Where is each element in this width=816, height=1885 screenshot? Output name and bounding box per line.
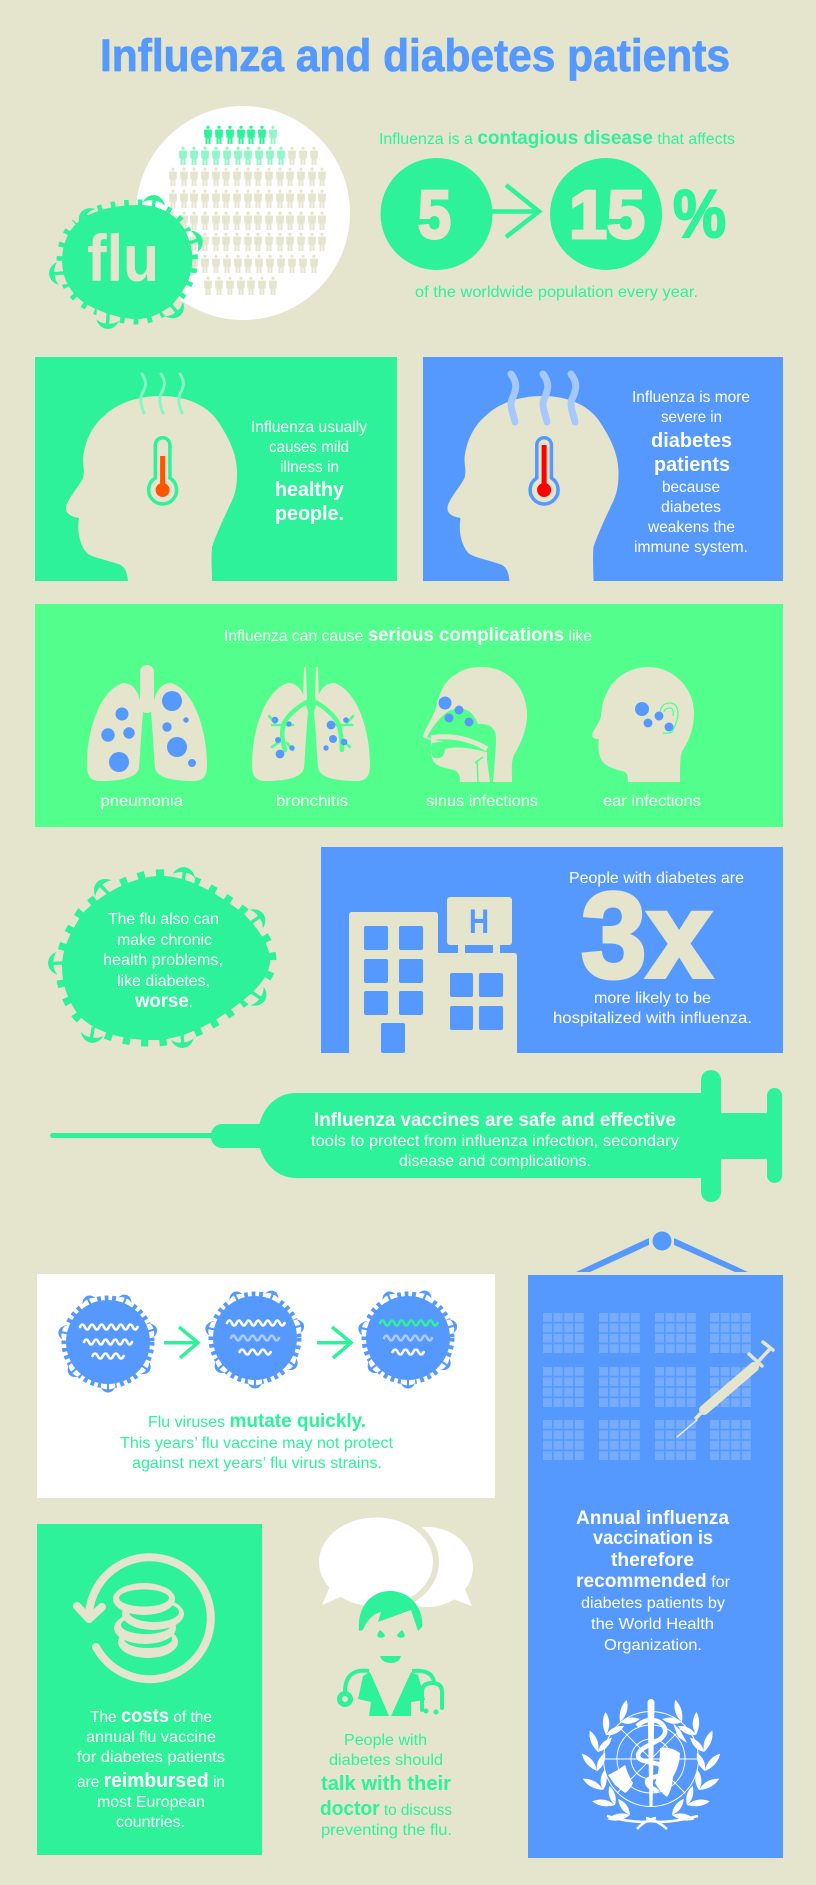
icon: hospital <box>349 897 517 1053</box>
text: patients <box>654 454 730 476</box>
panel: WHO recommendation <box>528 1232 783 1858</box>
head silhouette <box>447 396 618 581</box>
virus blob: chronic problems: worse. <box>134 991 193 1012</box>
panel: mutation: against next years’ flu virus strains. <box>132 1455 382 1472</box>
text: severe in <box>661 409 722 426</box>
text: Annual influenza <box>576 1508 729 1529</box>
panel: mutation <box>37 1274 495 1498</box>
text: people. <box>275 503 344 525</box>
roof <box>576 1232 748 1272</box>
syringe banner: disease and complications. <box>399 1153 591 1170</box>
text: immune system. <box>634 539 748 556</box>
text: Influenza is more <box>632 389 750 406</box>
panel: WHO recommendation: the World Health <box>591 1616 714 1633</box>
panel: complications <box>35 604 783 827</box>
flu label: flu <box>87 221 159 295</box>
text: Influenza usually <box>251 419 367 436</box>
text <box>632 389 750 556</box>
panel: costs: annual flu vaccine <box>86 1729 216 1746</box>
panel: WHO recommendation: diabetes patients by <box>581 1595 725 1612</box>
virus blob: chronic problems: health problems, <box>103 952 223 969</box>
icon: virus two <box>204 1288 306 1389</box>
stat: 5 to 15 percent: % <box>673 176 726 252</box>
panel: hospitalization <box>321 847 783 1053</box>
label: sinus infections <box>426 793 538 810</box>
big stat 3x: 3x <box>581 867 712 1003</box>
text: People with diabetes are <box>569 870 744 887</box>
label: ear infections <box>603 793 701 810</box>
panel: WHO recommendation: vaccination is <box>593 1528 713 1549</box>
doctor with speech bubbles: doctor to discuss <box>320 1798 452 1820</box>
text: Influenza vaccines are safe and effective <box>314 1110 676 1131</box>
intro sentence: Influenza is a contagious disease that affects <box>379 128 735 149</box>
icon: doctor <box>340 1591 442 1716</box>
stat: 5 to 15 percent: 5 <box>418 177 451 253</box>
stat: 5 to 15 percent: 15 <box>569 177 645 253</box>
icon: virus three <box>357 1288 459 1389</box>
icon: speech bubbles <box>319 1518 473 1607</box>
steam <box>511 374 576 422</box>
panel: WHO recommendation: therefore <box>611 1550 694 1571</box>
icon: pneumonia lungs <box>87 665 207 781</box>
doctor with speech bubbles: preventing the flu. <box>321 1822 452 1839</box>
syringe banner: tools to protect from influenza infection, secondary <box>311 1133 679 1150</box>
panel: costs <box>37 1524 262 1855</box>
text: diabetes <box>651 430 732 452</box>
intro sentence end: of the worldwide population every year. <box>415 284 698 301</box>
panel: costs: most European <box>97 1794 205 1811</box>
text: The flu also can <box>108 911 219 928</box>
text: because <box>662 479 720 496</box>
panel: WHO recommendation: Organization. <box>604 1637 702 1654</box>
arrow <box>490 185 539 237</box>
panel: mutation: This years’ flu vaccine may not protect <box>120 1435 394 1452</box>
virus blob: chronic problems: make chronic <box>117 932 212 949</box>
panel: WHO recommendation: recommended for <box>576 1571 731 1592</box>
text: diabetes <box>661 499 721 516</box>
text: weakens the <box>647 519 735 536</box>
icon: hospital: H <box>469 903 489 941</box>
panel: costs: are reimbursed in <box>77 1770 225 1792</box>
heading: Influenza can cause serious complications like <box>224 625 592 646</box>
virus blob: chronic problems <box>48 865 271 1049</box>
icon: WHO emblem <box>580 1697 722 1830</box>
flu virus icon <box>48 194 206 330</box>
panel: healthy people <box>35 357 397 581</box>
icon: coins and return arrow <box>77 1557 211 1679</box>
text: more likely to be <box>594 990 711 1007</box>
panel: costs: for diabetes patients <box>77 1749 225 1766</box>
panel: hospitalization: hospitalized with influenza. <box>553 1010 752 1027</box>
text: The costs of the <box>90 1706 212 1727</box>
icon: bronchitis lungs <box>252 667 370 781</box>
text <box>251 419 367 525</box>
head silhouette <box>66 396 237 581</box>
icon: sinus head <box>423 667 527 782</box>
people row: infected <box>204 126 266 144</box>
label: bronchitis <box>276 793 348 810</box>
doctor with speech bubbles <box>319 1518 473 1839</box>
icon: virus one <box>57 1292 159 1393</box>
arrow <box>164 1327 198 1358</box>
text: causes mild <box>269 439 349 456</box>
text: illness in <box>280 459 339 476</box>
white circle with people pictogram <box>136 106 350 320</box>
arrow <box>317 1327 351 1358</box>
text: People with <box>344 1732 427 1749</box>
text: Flu viruses mutate quickly. <box>148 1411 366 1432</box>
text: healthy <box>275 479 345 501</box>
syringe banner <box>50 1070 782 1202</box>
doctor with speech bubbles: talk with their <box>321 1773 451 1795</box>
doctor with speech bubbles: diabetes should <box>329 1752 443 1769</box>
panel: diabetes patients <box>423 357 783 581</box>
icon: ear head <box>592 667 694 782</box>
virus blob: chronic problems: like diabetes, <box>117 973 210 990</box>
steam <box>141 374 184 413</box>
thermometer <box>149 438 177 504</box>
thermometer <box>530 438 558 504</box>
panel: costs: countries. <box>116 1814 185 1831</box>
title: Influenza and diabetes patients <box>100 30 730 81</box>
stat: 5 to 15 percent <box>380 158 726 270</box>
label: pneumonia <box>100 793 183 810</box>
icon: small syringe <box>677 1342 773 1437</box>
window grid <box>543 1313 751 1460</box>
